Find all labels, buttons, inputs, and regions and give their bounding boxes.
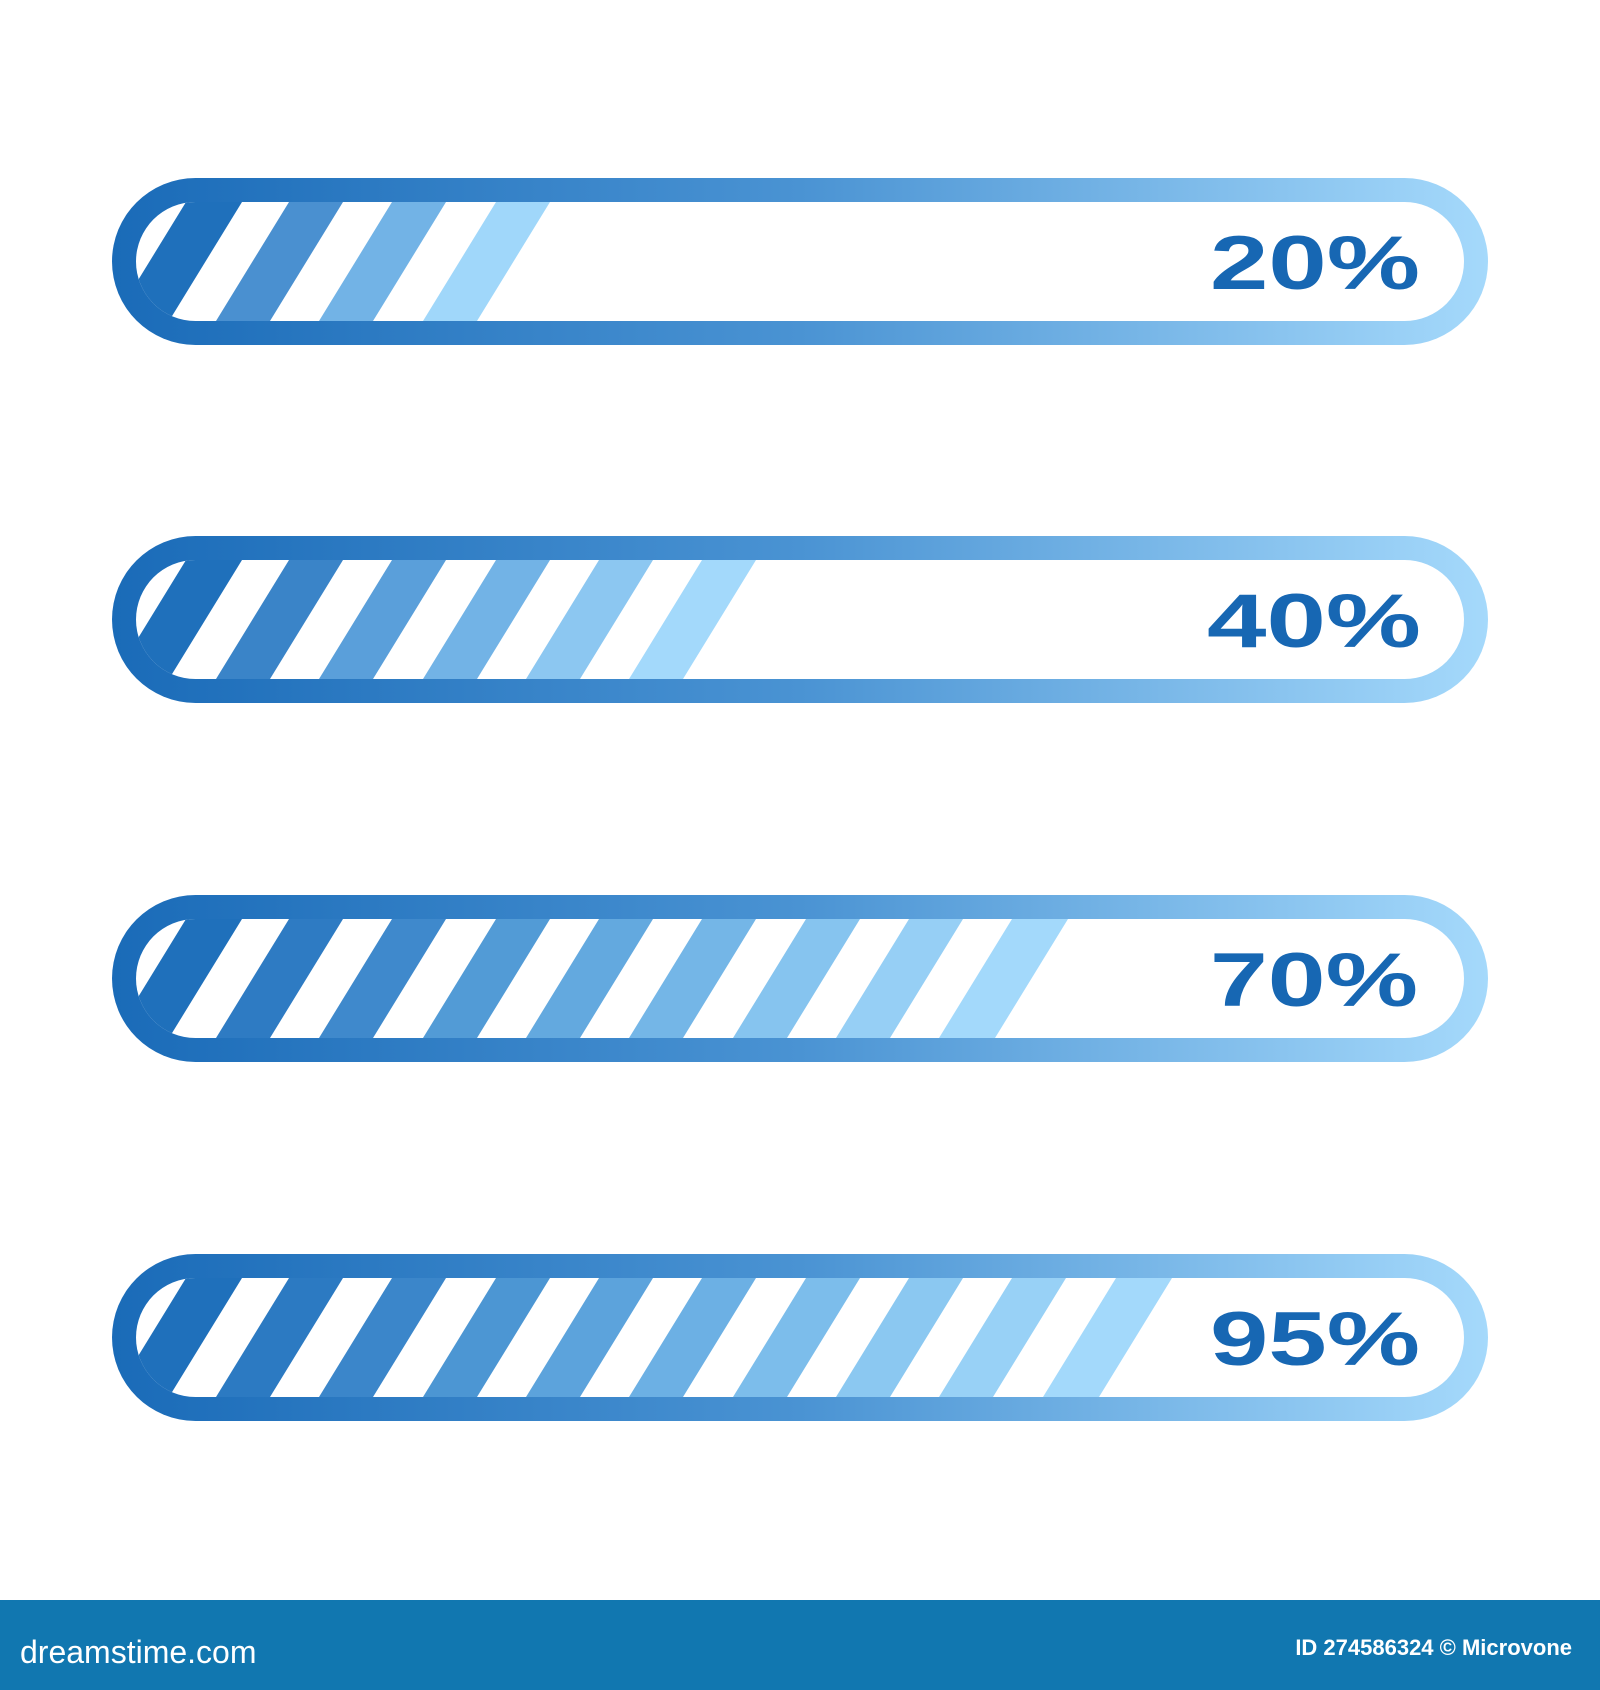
progress bar 70% — [112, 895, 1488, 1062]
label 95%: 95% — [1210, 1297, 1420, 1382]
label 40%: 40% — [1207, 579, 1421, 664]
progress bar 20% — [112, 178, 1488, 345]
progress bar 40% — [112, 536, 1488, 703]
label 20%: 20% — [1210, 221, 1420, 306]
footer bar — [0, 1600, 1600, 1690]
footer credit: ID 274586324 © Microvone — [1295, 1635, 1572, 1660]
progress bar 95% — [112, 1254, 1488, 1421]
label 70%: 70% — [1210, 938, 1418, 1023]
footer logo text: dreamstime.com — [20, 1634, 256, 1670]
